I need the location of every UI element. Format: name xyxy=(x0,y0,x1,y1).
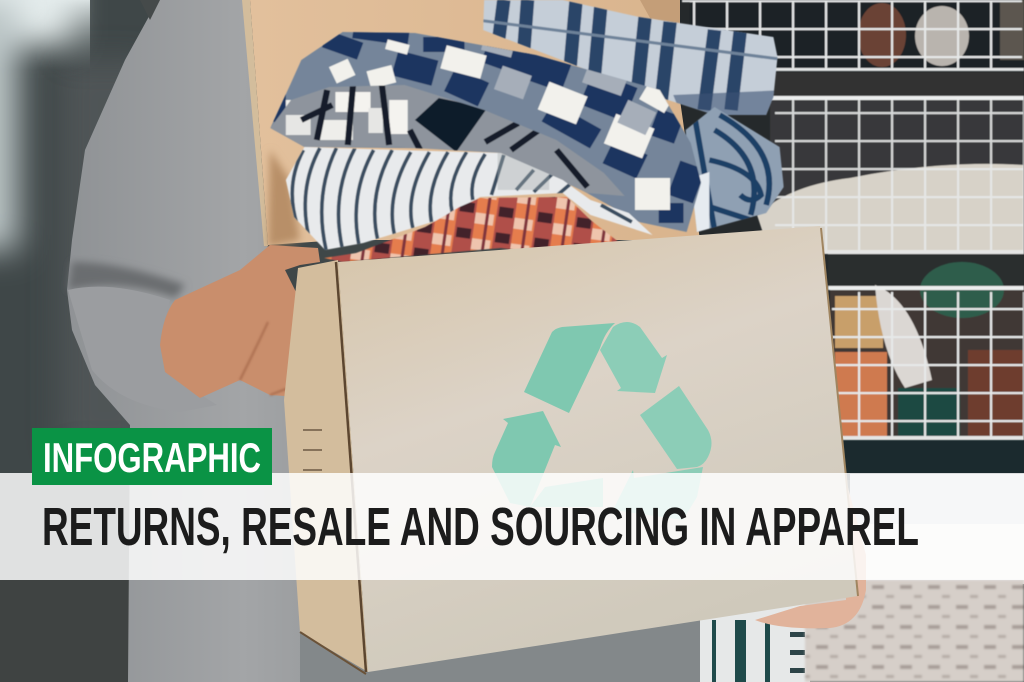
green label: INFOGRAPHIC: INFOGRAPHIC xyxy=(43,434,261,481)
green label: INFOGRAPHIC xyxy=(32,428,272,485)
striped shirt xyxy=(281,145,658,255)
icon: recycling symbol xyxy=(492,322,712,520)
translucent title band xyxy=(0,473,1024,580)
person in grey shirt xyxy=(67,0,700,682)
wire shelves with folded clothes xyxy=(682,0,1024,440)
middle dark plaid shirt xyxy=(271,84,624,196)
main blue plaid shirt xyxy=(265,24,709,235)
red plaid shirt xyxy=(324,196,618,262)
hand holding box xyxy=(160,245,320,398)
rolled plaid shirt xyxy=(685,107,784,232)
hand under box xyxy=(755,480,866,628)
cardboard box xyxy=(284,226,858,674)
folded clothes stack xyxy=(265,0,787,270)
back plaid shirt xyxy=(477,0,787,120)
lower right background with wicker basket xyxy=(686,474,1024,682)
cardboard box behind clothes xyxy=(242,0,700,247)
